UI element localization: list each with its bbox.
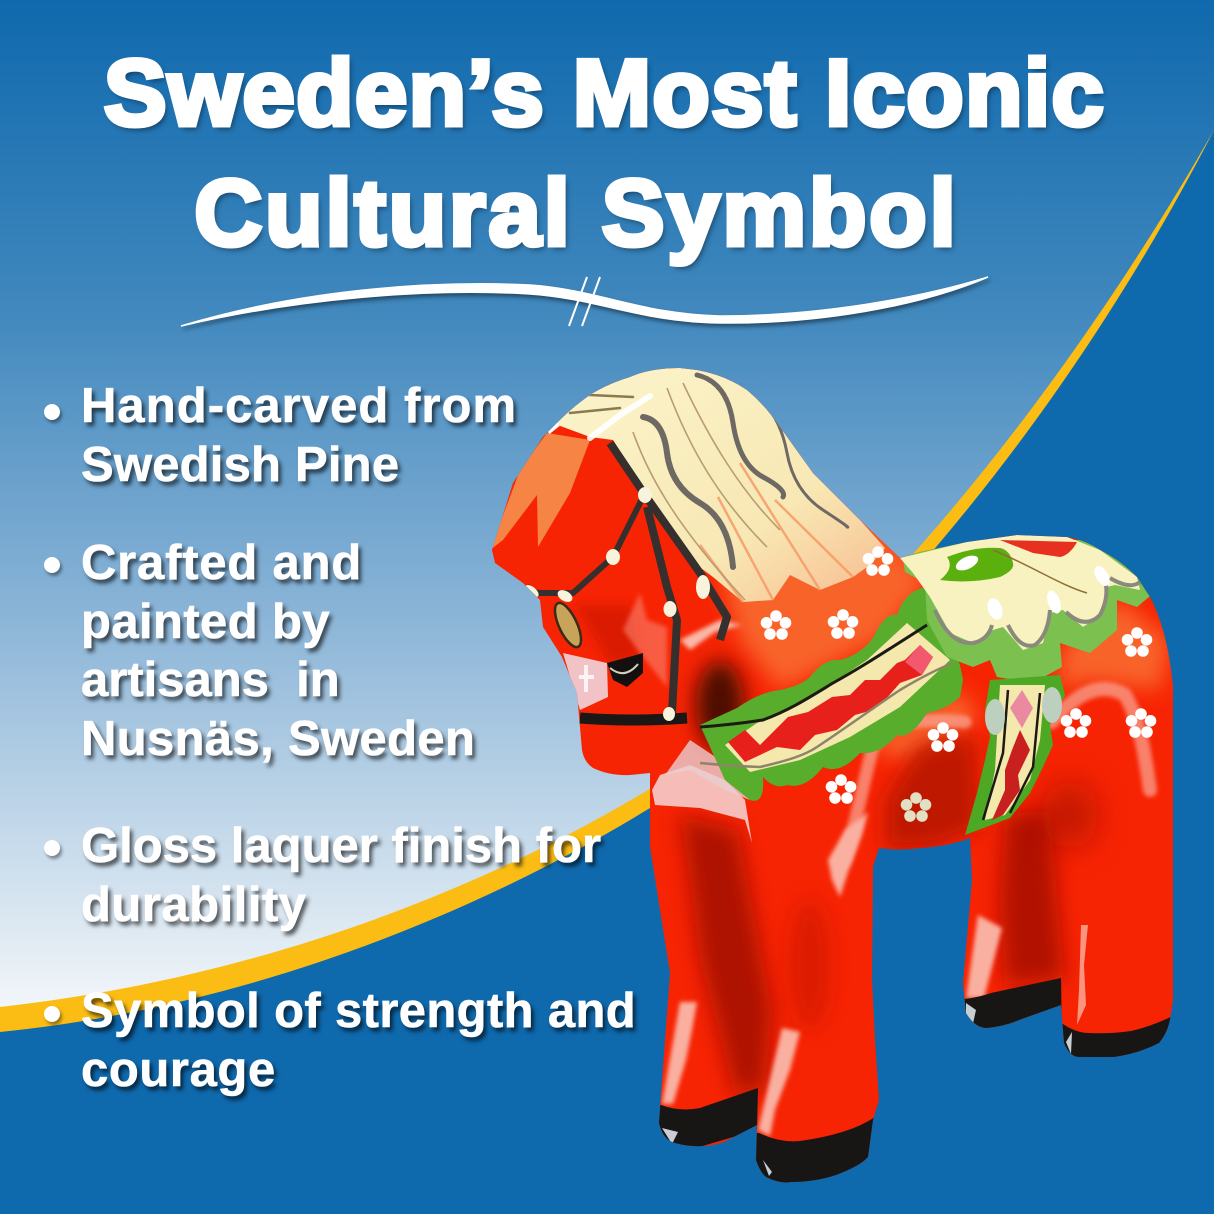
dala horse illustration	[492, 368, 1173, 1182]
mane white edge	[590, 396, 650, 438]
orange neck and rump	[720, 510, 1170, 760]
face shadow	[575, 605, 640, 665]
saddle	[900, 535, 1155, 683]
bullet: gloss finish	[44, 819, 606, 938]
leg and under-neck shadows	[680, 661, 1098, 1095]
base red	[480, 360, 1190, 1190]
bullet: gloss finish: Gloss laquer finish for	[81, 819, 601, 873]
black hooves	[655, 978, 1175, 1190]
neck garland	[700, 587, 963, 801]
girth strap	[965, 675, 1065, 835]
bullet: hand-carved: Swedish Pine	[81, 438, 399, 492]
bridle studs	[523, 487, 710, 721]
eye	[607, 653, 643, 687]
mane orange streaks	[700, 463, 853, 602]
title line two: Cultural Symbol	[194, 160, 959, 265]
saddle red leaf	[1000, 540, 1077, 557]
title line one: Sweden’s Most Iconic	[104, 40, 1105, 145]
bullet: crafted and painted: painted by	[81, 594, 330, 648]
pink gloss bands	[845, 689, 1150, 860]
bridle straps	[527, 443, 727, 720]
bullet: hand-carved	[44, 379, 520, 492]
bullet: symbol of strength: courage	[81, 1042, 276, 1096]
muzzle highlight	[563, 653, 608, 710]
cheek highlights	[623, 593, 742, 687]
face orange plane	[490, 433, 590, 550]
bullet: hand-carved: Hand-carved from	[81, 379, 517, 433]
cheek oval ornament	[554, 602, 582, 648]
bullet: crafted and painted	[44, 536, 478, 770]
bullet: crafted and painted: Crafted and	[81, 536, 362, 590]
mane tan lines	[633, 383, 780, 600]
hoof glints	[662, 1003, 1072, 1176]
bullet: gloss finish: durability	[81, 878, 307, 932]
bullet: symbol of strength: Symbol of strength and	[81, 984, 636, 1038]
bullet: symbol of strength	[44, 984, 638, 1103]
saddle green swirl	[940, 548, 1013, 581]
bullet: crafted and painted: artisans in	[81, 653, 340, 707]
chest garland fade	[665, 740, 750, 800]
decorative title underline	[180, 276, 992, 332]
mane	[548, 368, 885, 602]
shoulder and leg highlights	[662, 812, 1088, 1136]
bullet list	[44, 379, 638, 1103]
bullet: crafted and painted: Nusnäs, Sweden	[81, 712, 475, 766]
mane dark waves	[570, 375, 848, 567]
chest gloss patch	[652, 765, 752, 843]
white flowers	[761, 546, 1156, 822]
